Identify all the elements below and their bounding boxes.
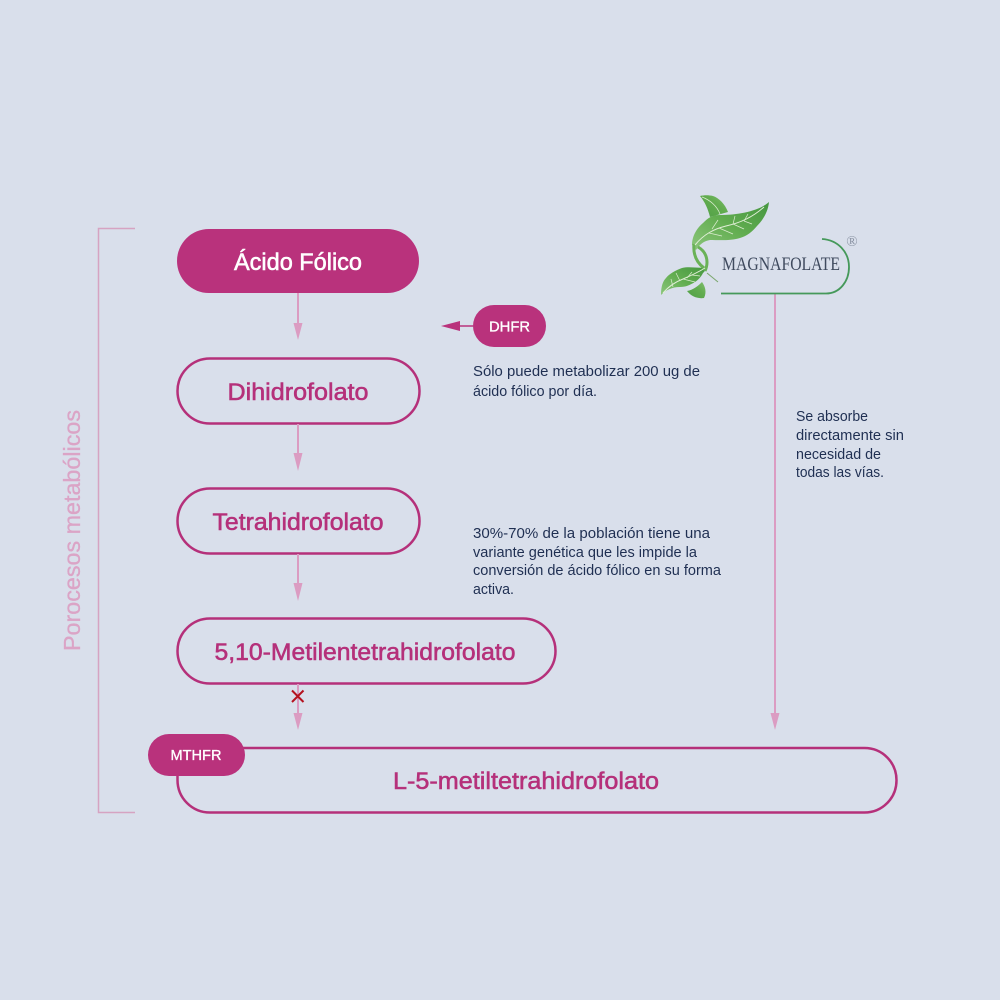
wordmark: MAGNAFOLATE [722,254,840,275]
box: 5,10-Metilentetrahidrofolato [178,618,556,684]
note: DHFR limit: ácido fólico por día. [473,384,597,400]
box: 5,10-Metilentetrahidrofolato: 5,10-Metilentetrahidrofolato [214,639,516,666]
note: genetic variant: 30%-70% de la población tiene una [473,526,711,542]
enzyme badge: MTHFR: MTHFR [170,747,222,764]
note: genetic variant: conversión de ácido fólico en su forma [473,563,722,579]
logo outline [721,239,849,294]
blocked arrow to L-5-metiltetrahidrofolato [292,684,304,730]
arrow: Ácido Fólico to Dihidrofolato [294,293,302,340]
registered mark: ® [846,234,858,250]
box: Ácido Fólico: Ácido Fólico [234,249,362,276]
logo: Magnafolate [661,195,858,298]
box: Tetrahidrofolato: Tetrahidrofolato [212,509,384,536]
note: direct absorption: directamente sin [796,428,904,444]
box: Tetrahidrofolato [178,488,420,554]
box: L-5-metiltetrahidrofolato: L-5-metiltetrahidrofolato [393,768,659,795]
arrow: Tetrahidrofolato to Metilentetrahidrofolato [294,554,302,601]
note: DHFR limit: Sólo puede metabolizar 200 ug de [473,364,700,380]
enzyme badge: DHFR: DHFR [489,318,530,336]
arrow: Magnafolate direct to L-5-metiltetrahidrofolato [770,294,780,730]
note: direct absorption: todas las vías. [796,465,884,481]
note: direct absorption: necesidad de [796,447,881,463]
side label: Porocesos metabólicos: Porocesos metabólicos [59,410,85,651]
note: genetic variant: activa. [473,582,514,598]
arrow: DHFR pointing left [441,321,473,331]
box: L-5-metiltetrahidrofolato [178,748,896,812]
box: Dihidrofolato [178,358,420,424]
icon: red cross [292,690,304,702]
arrow: Dihidrofolato to Tetrahidrofolato [294,424,302,471]
bracket: metabolic processes [98,228,135,812]
box: Ácido Fólico [177,229,419,293]
note: genetic variant: variante genética que les impide la [473,545,698,561]
enzyme badge: DHFR [473,305,546,347]
enzyme badge: MTHFR [148,734,245,776]
note: direct absorption: Se absorbe [796,409,868,425]
box: Dihidrofolato: Dihidrofolato [228,379,368,406]
icon: leaves and stem [661,195,769,298]
